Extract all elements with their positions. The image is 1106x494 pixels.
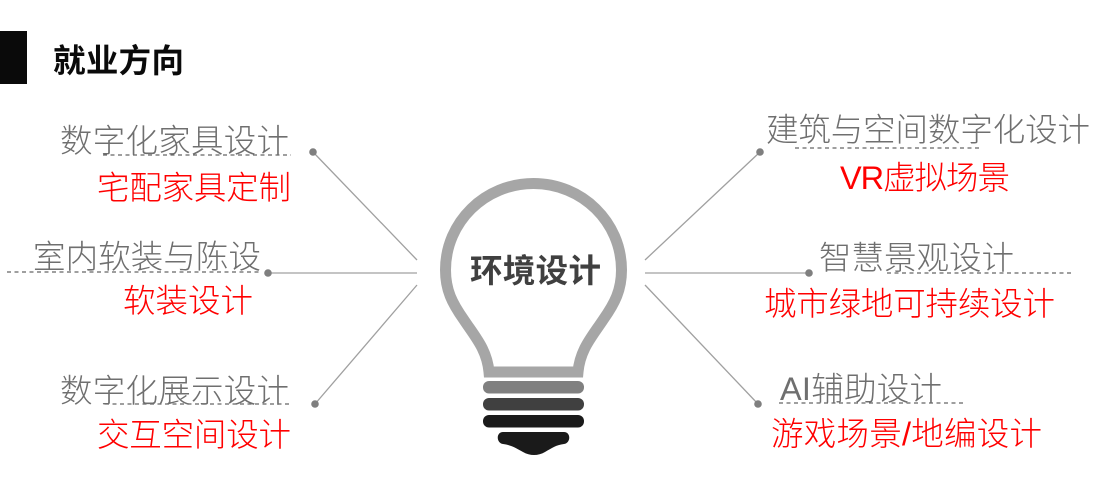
bulb base stripe 1	[483, 381, 584, 394]
dashed underline	[7, 271, 262, 273]
connector	[315, 285, 417, 404]
connector dot	[756, 148, 764, 156]
direction title: 数字化家具设计	[60, 123, 289, 159]
direction detail: 游戏场景/地编设计	[771, 416, 1042, 452]
connector dot	[805, 269, 813, 277]
dashed underline	[103, 154, 291, 156]
connector dot	[309, 148, 317, 156]
heading block	[0, 31, 184, 84]
heading text: 就业方向	[53, 43, 184, 79]
connector dot	[264, 269, 272, 277]
direction title: AI辅助设计	[780, 371, 942, 407]
bulb base stripe 2	[483, 398, 584, 410]
dashed underline	[105, 403, 291, 405]
branch: digital furniture design	[60, 123, 417, 260]
direction detail: 城市绿地可持续设计	[764, 286, 1055, 322]
branch: architecture digital design	[645, 112, 1090, 260]
bulb label: 环境设计	[470, 253, 601, 289]
direction title: 室内软装与陈设	[33, 239, 261, 275]
connector	[645, 285, 758, 404]
connector	[645, 152, 760, 260]
branch: AI-assisted design	[645, 285, 1042, 452]
heading marker bar	[0, 31, 27, 84]
direction detail: 软装设计	[123, 283, 253, 319]
dashed underline	[779, 402, 963, 404]
dashed underline	[887, 272, 1072, 274]
bulb base stripe 3	[483, 415, 584, 428]
connector	[313, 152, 417, 260]
direction detail: VR虚拟场景	[840, 160, 1010, 196]
bulb glass outline	[446, 184, 622, 372]
bulb tip	[498, 432, 569, 455]
branch: interior soft furnishing	[7, 239, 417, 319]
icon: light bulb	[446, 184, 622, 455]
direction detail: 交互空间设计	[97, 417, 291, 453]
direction title: 数字化展示设计	[60, 373, 289, 409]
connector	[268, 272, 417, 274]
branch: digital exhibition design	[60, 285, 417, 453]
direction title: 建筑与空间数字化设计	[766, 112, 1090, 148]
direction detail: 宅配家具定制	[97, 170, 291, 206]
connector	[645, 272, 809, 274]
dashed underline	[795, 147, 980, 149]
connector dot	[311, 400, 319, 408]
direction title: 智慧景观设计	[819, 240, 1014, 276]
branch: smart landscape design	[645, 240, 1072, 322]
connector dot	[754, 400, 762, 408]
